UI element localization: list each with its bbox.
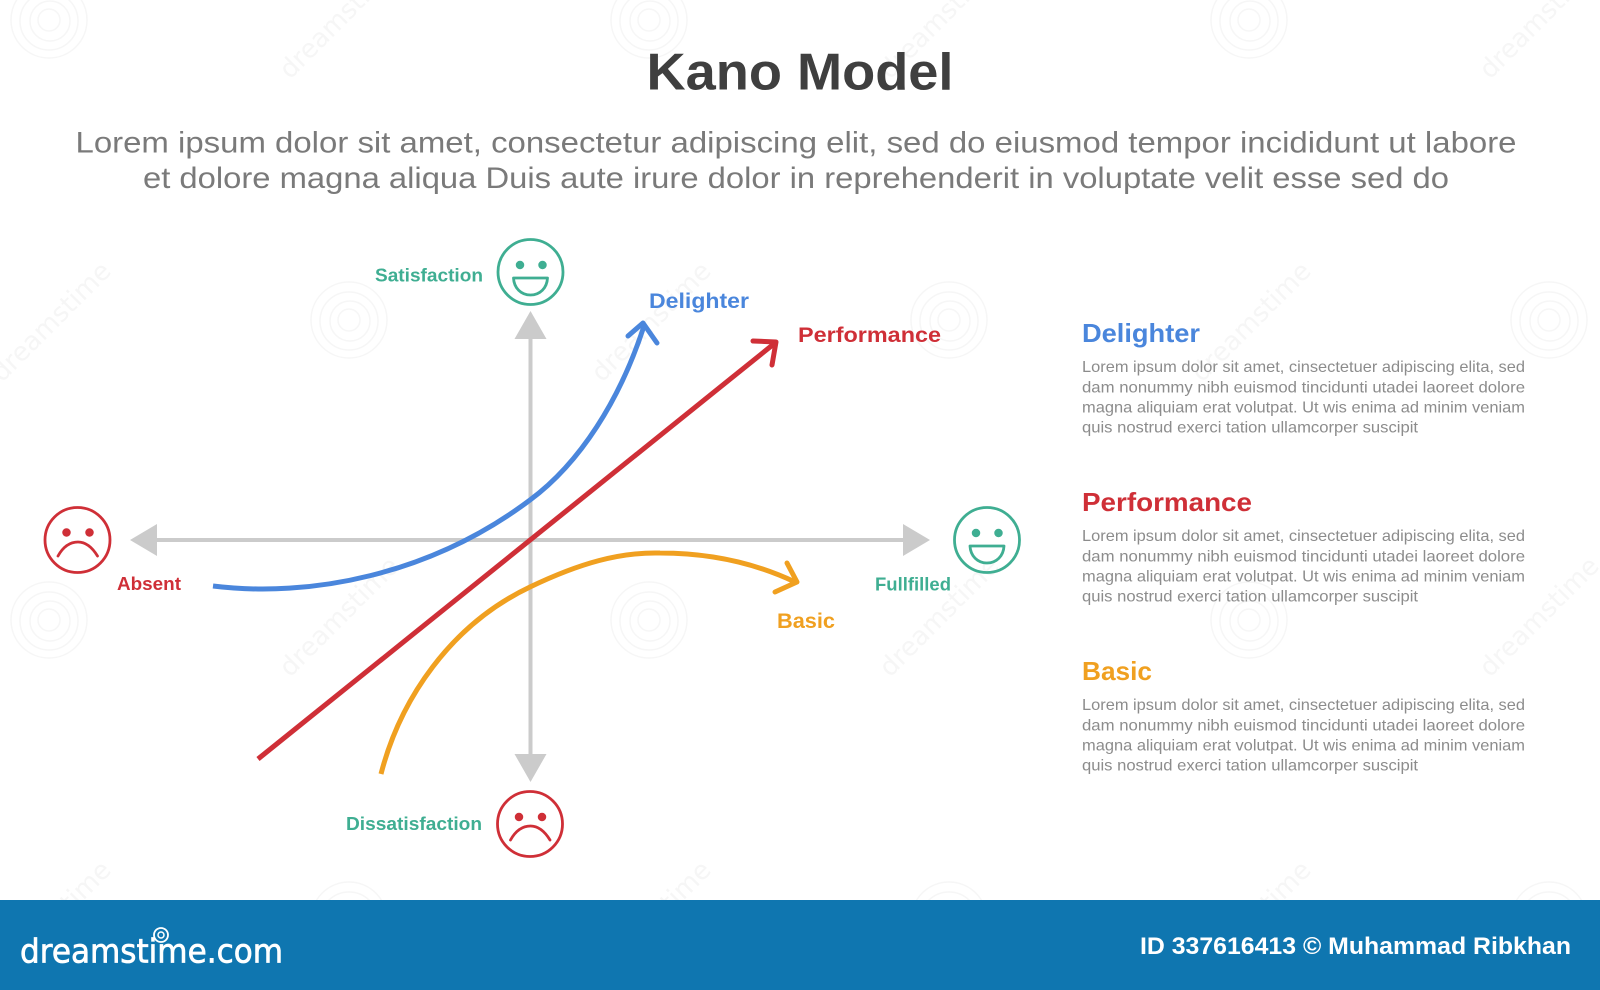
heading: basic: Basic — [1082, 656, 1152, 686]
curve: performance — [258, 341, 776, 759]
icon: sad face left — [45, 508, 110, 572]
axis label: satisfaction: Satisfaction — [375, 266, 483, 286]
watermark text: dreamstime — [874, 551, 1005, 683]
heading: performance: Performance — [1082, 487, 1252, 517]
logo: dreamstime: dreamstime.com — [20, 932, 283, 970]
curve: basic — [381, 553, 797, 774]
text block: performance: quis nostrud exerci tation ullamcorper suscipit — [1082, 589, 1419, 606]
text block: delighter — [1082, 359, 1525, 437]
text block: performance — [1082, 528, 1525, 606]
watermark text: dreamstime — [1186, 256, 1317, 388]
image id and credit: ID 337616413 © Muhammad Ribkhan — [1140, 933, 1571, 960]
axis label: dissatisfaction: Dissatisfaction — [346, 814, 482, 834]
panel: delighter description — [1082, 318, 1525, 437]
subtitle: et dolore magna aliqua Duis aute irure dolor in reprehenderit in voluptate velit esse sed do — [143, 162, 1449, 195]
text block: delighter: magna aliquiam erat volutpat. Ut wis enima ad minim veniam — [1082, 400, 1525, 417]
curve label: delighter: Delighter — [649, 290, 749, 313]
text block: basic — [1082, 697, 1525, 775]
axis label: fullfilled: Fullfilled — [875, 574, 951, 594]
curve label: basic: Basic — [777, 610, 835, 633]
text block: performance: magna aliquiam erat volutpat. Ut wis enima ad minim veniam — [1082, 569, 1525, 586]
axis label: absent: Absent — [117, 574, 181, 594]
heading: delighter: Delighter — [1082, 318, 1200, 348]
text block: basic: Lorem ipsum dolor sit amet, cinsectetuer adipiscing elita, sed — [1082, 697, 1525, 714]
text block: performance: dam nonummy nibh euismod tincidunti utadei laoreet dolore — [1082, 548, 1525, 565]
watermark text: dreamstime — [586, 256, 717, 388]
text block: delighter: quis nostrud exerci tation ullamcorper suscipit — [1082, 420, 1419, 437]
watermark text: dreamstime — [274, 551, 405, 683]
curve label: performance: Performance — [798, 324, 941, 347]
horizontal axis arrow — [130, 524, 930, 556]
text block: basic: quis nostrud exerci tation ullamcorper suscipit — [1082, 758, 1419, 775]
vertical axis arrow — [514, 311, 546, 782]
watermark text: dreamstime — [586, 855, 717, 987]
watermark text: dreamstime — [1186, 855, 1317, 987]
panel: basic description — [1082, 656, 1525, 775]
curve: delighter — [213, 323, 657, 589]
title: Kano Model — [646, 44, 954, 102]
subtitle — [76, 127, 1516, 195]
text block: basic: dam nonummy nibh euismod tincidunti utadei laoreet dolore — [1082, 717, 1525, 734]
icon: happy face top — [498, 240, 563, 304]
text block: basic: magna aliquiam erat volutpat. Ut wis enima ad minim veniam — [1082, 738, 1525, 755]
text block: delighter: Lorem ipsum dolor sit amet, cinsectetuer adipiscing elita, sed — [1082, 359, 1525, 376]
chart: Kano diagram — [45, 240, 1020, 856]
icon: sad face bottom — [498, 792, 562, 856]
text block: delighter: dam nonummy nibh euismod tincidunti utadei laoreet dolore — [1082, 379, 1525, 396]
panel: performance description — [1082, 487, 1525, 606]
text block: performance: Lorem ipsum dolor sit amet, cinsectetuer adipiscing elita, sed — [1082, 528, 1525, 545]
footer banner — [0, 900, 1600, 990]
icon: happy face right — [954, 508, 1020, 572]
subtitle: Lorem ipsum dolor sit amet, consectetur adipiscing elit, sed do eiusmod tempor incididunt ut labore — [76, 127, 1516, 160]
